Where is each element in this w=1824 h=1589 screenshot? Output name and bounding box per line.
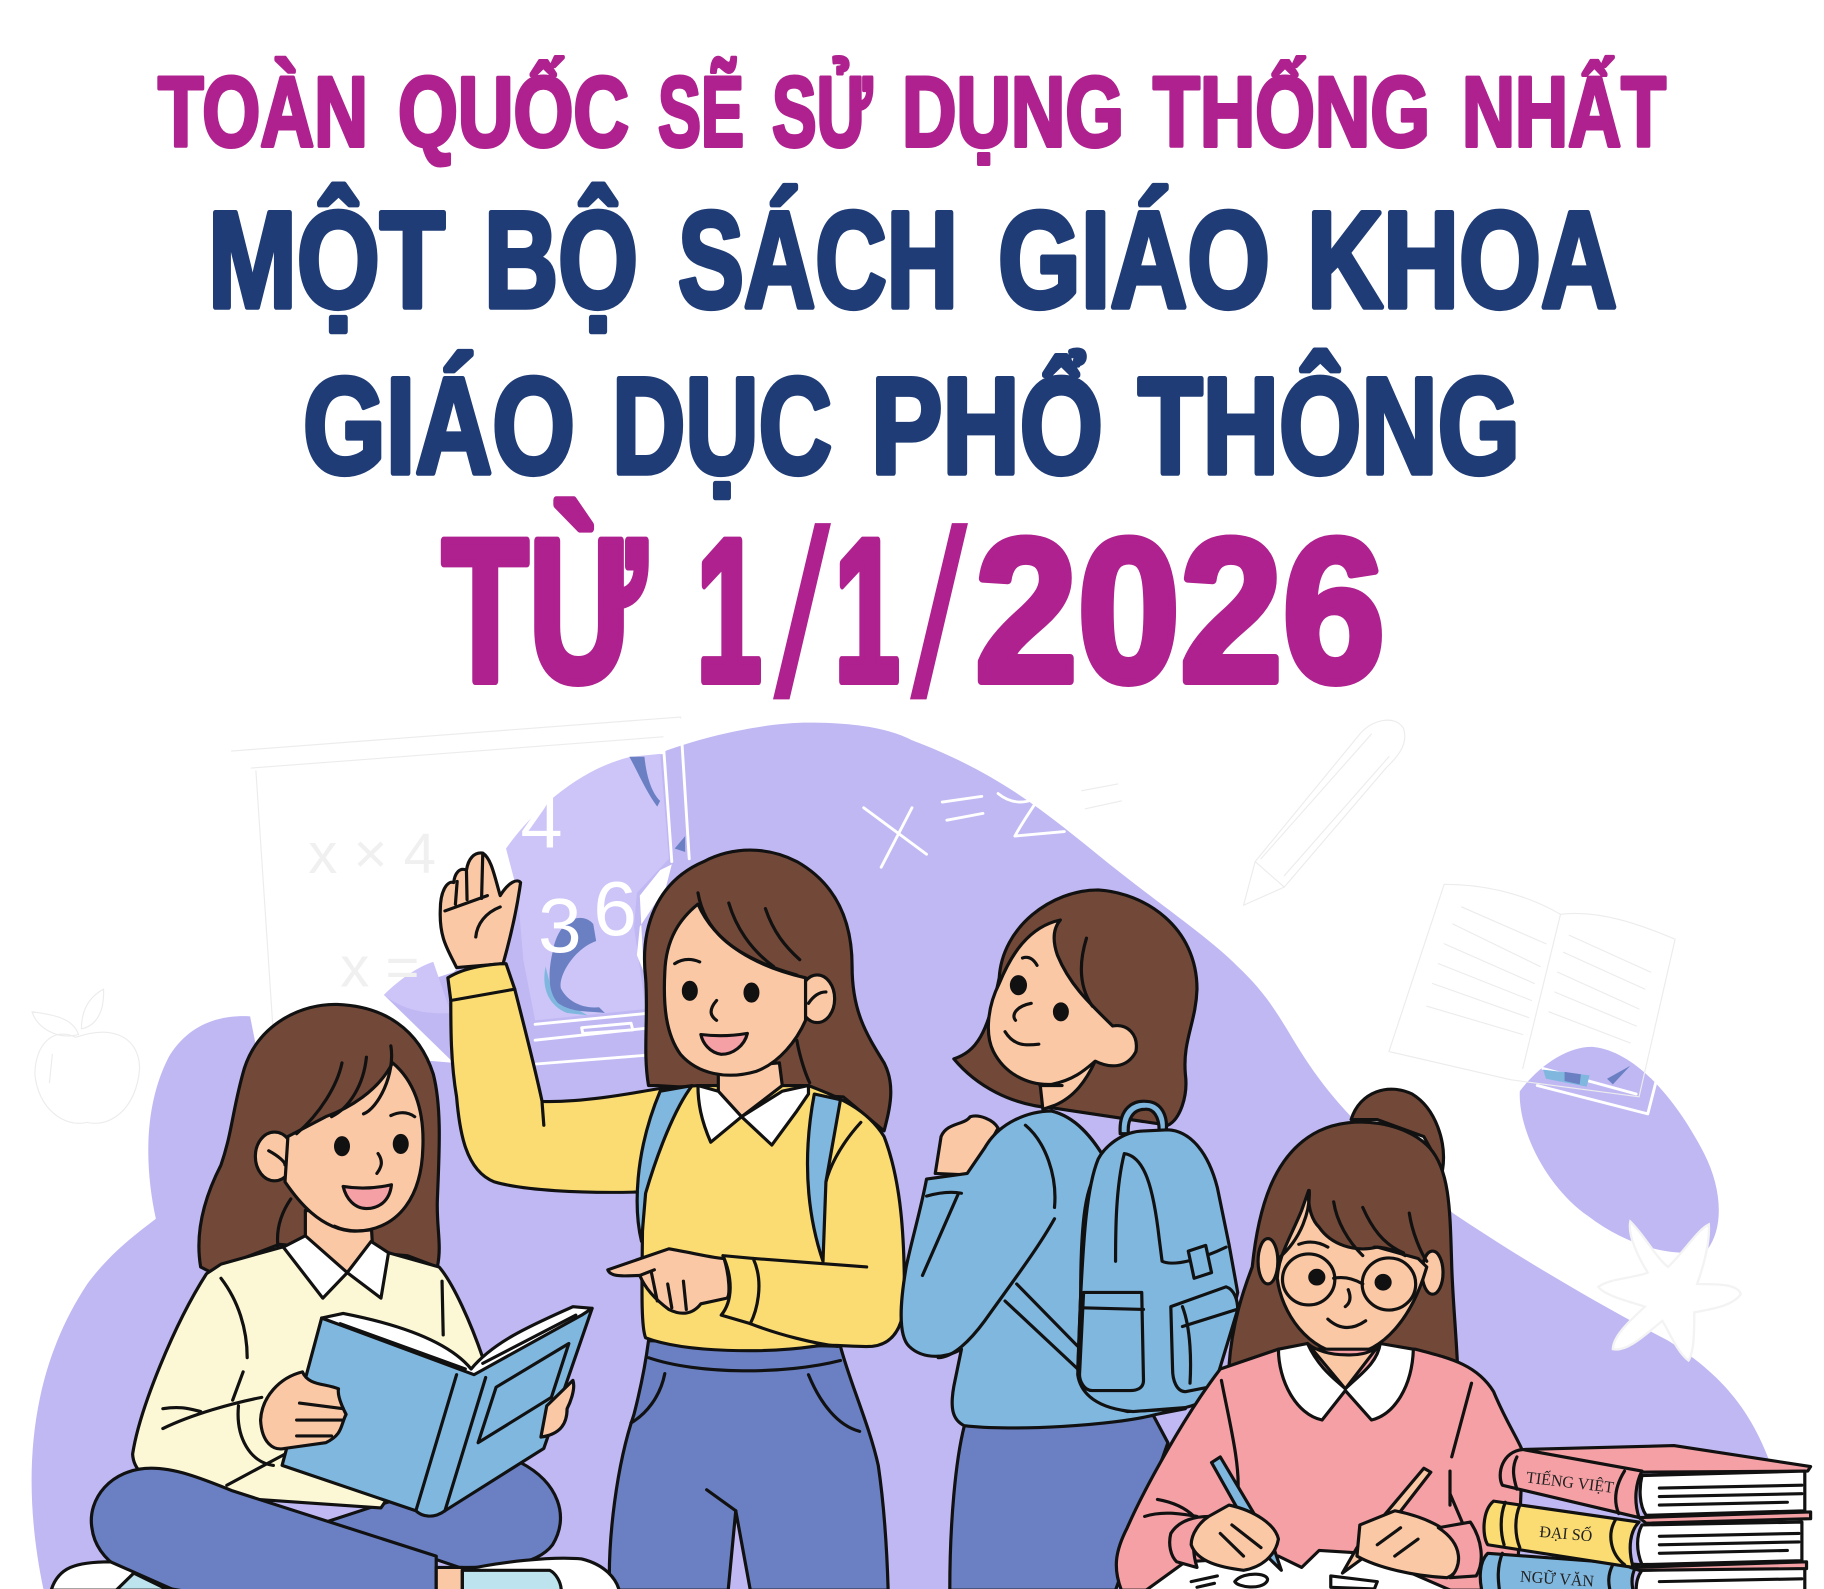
title line 2: MỘT	[208, 184, 445, 337]
ear right	[1422, 1251, 1443, 1294]
student 3: blue sweater with backpack	[901, 890, 1238, 1589]
glasses left	[1282, 1254, 1335, 1305]
right cuff	[1438, 1522, 1481, 1578]
title line 4: date: 2026	[975, 497, 1385, 725]
facial features	[675, 893, 826, 1083]
collar	[283, 1236, 389, 1298]
collar	[698, 1086, 808, 1145]
icon: star	[1598, 1222, 1741, 1361]
sweater	[901, 1111, 1185, 1428]
book 2: Đại số	[1484, 1501, 1807, 1570]
title line 3: GIÁO	[303, 350, 575, 503]
title line 4: date: /	[910, 480, 968, 748]
right fingers	[541, 1380, 574, 1437]
side pocket	[1171, 1287, 1238, 1392]
title line 2: BỘ	[484, 184, 638, 337]
left sock	[116, 1573, 169, 1589]
student 2: yellow sweater raising hand	[440, 850, 904, 1589]
book 1: Tiếng Việt: TIẾNG VIỆT	[1525, 1467, 1615, 1497]
eye left	[336, 1138, 348, 1155]
left hand	[1191, 1505, 1278, 1570]
sweater details	[542, 1103, 867, 1346]
title line 4: date: 1	[696, 497, 762, 725]
paper	[1145, 1550, 1453, 1589]
title line 1: QUỐC	[398, 56, 629, 167]
title line 1: NHẤT	[1462, 56, 1666, 167]
left hand	[261, 1372, 346, 1449]
neck	[718, 1063, 782, 1117]
face	[664, 904, 806, 1075]
chalk writing: 3	[538, 884, 582, 969]
hair bun	[1351, 1089, 1443, 1171]
sleeve cuff	[448, 964, 515, 1000]
sweater	[451, 989, 904, 1351]
book	[282, 1308, 592, 1516]
ear left	[1258, 1239, 1278, 1284]
book stack	[1480, 1446, 1811, 1589]
glasses bridge and smile	[1328, 1278, 1366, 1328]
eye right	[394, 1135, 407, 1152]
book 3: Ngữ văn	[1480, 1553, 1805, 1589]
icon: open book outline	[1389, 884, 1675, 1114]
blue pencil	[1212, 1457, 1281, 1570]
hair	[645, 850, 891, 1131]
title line 4: date: 1	[834, 497, 900, 725]
neck	[305, 1210, 372, 1273]
title line 1: DỤNG	[902, 56, 1124, 167]
neck	[1040, 1061, 1095, 1109]
icon: faint pencil	[1244, 720, 1405, 905]
book 2: Đại số: ĐẠI SỐ	[1539, 1522, 1593, 1545]
right shoe	[462, 1558, 619, 1589]
title line 4: date	[442, 480, 1385, 748]
chalk writing	[308, 780, 637, 999]
book details	[340, 1315, 576, 1511]
backpack strap right	[807, 1094, 840, 1261]
facial features	[269, 1046, 415, 1247]
title line 1: SẼ	[658, 56, 744, 167]
student 4: writing with glasses	[1116, 1089, 1523, 1589]
front leg	[91, 1468, 436, 1589]
backpack strap left	[637, 1086, 692, 1241]
trousers	[609, 1341, 888, 1589]
ankle	[436, 1567, 462, 1589]
backpack	[1078, 1130, 1238, 1412]
left shoe	[51, 1562, 174, 1589]
finger lines	[297, 1403, 343, 1436]
right hand	[1357, 1511, 1462, 1578]
hand on strap	[935, 1116, 998, 1175]
left cuff	[1170, 1516, 1209, 1567]
front pocket	[1080, 1292, 1143, 1391]
blue paint on board	[544, 966, 587, 1015]
eye left	[683, 982, 696, 999]
eye right	[1054, 1004, 1067, 1020]
paper doodles	[1191, 1574, 1377, 1589]
ear	[255, 1132, 294, 1181]
chalk writing: x × 4	[308, 823, 436, 886]
mouth	[701, 1033, 747, 1054]
title line 1	[158, 56, 1666, 167]
trousers	[950, 1416, 1168, 1589]
pointing hand	[608, 1249, 729, 1313]
chalkboard frame	[231, 717, 689, 1035]
chalk writing: 4	[521, 780, 563, 863]
icon: faint apple	[32, 989, 140, 1123]
title line 4: date: TỪ	[442, 497, 647, 725]
chalkboard	[230, 717, 689, 1064]
neck	[1308, 1343, 1380, 1389]
book pages	[322, 1307, 592, 1375]
sweater details	[922, 1111, 1107, 1369]
pocket details	[1082, 1307, 1237, 1383]
title line 2: KHOA	[1307, 184, 1617, 337]
illustration	[32, 717, 1811, 1589]
title line 1: TOÀN	[158, 56, 368, 167]
hair	[1229, 1122, 1458, 1366]
face	[988, 920, 1136, 1084]
glasses right	[1362, 1258, 1416, 1310]
backpack buckle	[1188, 1245, 1212, 1278]
fringe lines	[1278, 1190, 1427, 1261]
eye left	[1011, 977, 1025, 994]
right sock	[462, 1570, 561, 1589]
title	[158, 56, 1666, 748]
raised hand	[440, 853, 521, 968]
mouth	[343, 1185, 391, 1209]
raised hand details	[445, 854, 500, 937]
chalk writing: 6	[593, 867, 637, 952]
title line 2: SÁCH	[678, 184, 958, 337]
finger lines	[1220, 1525, 1418, 1556]
title line 3: THÔNG	[1138, 349, 1520, 503]
student 1: reading a book	[51, 1004, 619, 1589]
wrist cuff	[721, 1256, 759, 1324]
eye right	[1376, 1275, 1390, 1289]
sweater details	[163, 1278, 443, 1485]
face	[285, 1063, 423, 1231]
backpack handle	[1120, 1101, 1166, 1134]
face	[1277, 1190, 1427, 1355]
title line 3: DỤC	[612, 350, 832, 503]
title line 3: PHỔ	[871, 349, 1103, 503]
orange pencil	[1342, 1468, 1431, 1573]
backpack flap	[1116, 1154, 1226, 1263]
title line 1: SỬ	[772, 56, 873, 167]
title line 2	[208, 184, 1617, 337]
ear	[800, 975, 835, 1023]
facial features	[1005, 938, 1092, 1086]
eye left	[1310, 1270, 1324, 1284]
collar	[1278, 1343, 1413, 1420]
sweater	[1116, 1349, 1523, 1589]
title line 3	[303, 349, 1520, 503]
title line 2: GIÁO	[998, 184, 1270, 337]
book 1: Tiếng Việt	[1500, 1446, 1811, 1523]
background blob	[32, 723, 1797, 1589]
sweater details	[1145, 1380, 1472, 1528]
hair	[954, 890, 1197, 1125]
title line 4: date: /	[773, 480, 831, 748]
equation x = 2 =	[864, 767, 1121, 867]
trouser details	[631, 1358, 860, 1511]
title line 1: THỐNG	[1153, 56, 1430, 167]
eye right	[745, 984, 758, 1001]
chalk writing: x =	[340, 936, 419, 999]
hair	[199, 1004, 439, 1271]
sweater	[133, 1247, 483, 1508]
finger lines	[640, 1270, 686, 1309]
back leg	[326, 1463, 560, 1567]
